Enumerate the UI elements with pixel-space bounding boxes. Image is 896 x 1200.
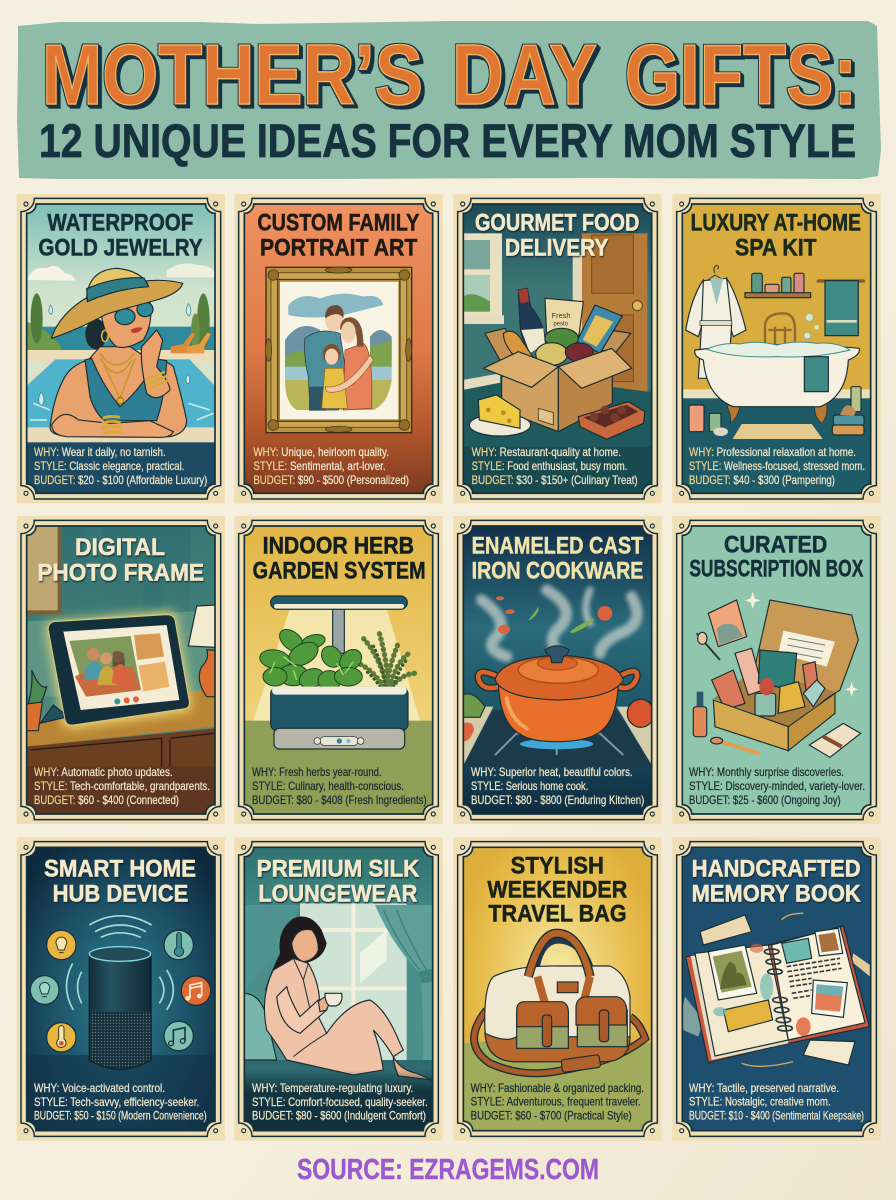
title line: GIFTS: [625, 28, 857, 123]
card: custom family portrait art [234, 194, 443, 503]
card frame [672, 516, 881, 824]
heading: LOUNGEWEAR [258, 881, 417, 908]
details text: BUDGET: $80 - $600 (Indulgent Comfort) [252, 1109, 426, 1122]
heading [689, 532, 863, 583]
heading [253, 532, 426, 584]
card frame [234, 194, 443, 503]
source line: SOURCE: EZRAGEMS.COM [297, 1154, 599, 1186]
details text: STYLE: Sentimental, art-lover. [253, 460, 386, 473]
heading: PHOTO FRAME [37, 560, 204, 587]
illustration: smart speaker with icons [26, 916, 215, 1132]
illustration: orange pot on stove [463, 590, 654, 767]
heading: CURATED [724, 532, 827, 559]
details text: WHY: Superior heat, beautiful colors. [471, 766, 633, 779]
details text: BUDGET: $80 - $800 (Enduring Kitchen) [471, 794, 644, 807]
details text: WHY: Fashionable & organized packing. [471, 1082, 644, 1095]
details text: BUDGET: $25 - $600 (Ongoing Joy) [689, 794, 841, 807]
card: indoor herb garden system [234, 516, 443, 824]
heading: DIGITAL [75, 534, 165, 561]
details text [689, 446, 865, 487]
details text: STYLE: Culinary, health-conscious. [252, 780, 404, 793]
details text: BUDGET: $60 - $400 (Connected) [34, 794, 179, 807]
heading [257, 210, 419, 262]
heading [472, 532, 644, 584]
heading: GOLD JEWELRY [38, 235, 203, 262]
title line [42, 28, 857, 123]
details text: STYLE: Adventurous, frequent traveler. [471, 1095, 641, 1108]
card: waterproof gold jewelry [17, 194, 225, 503]
details text: BUDGET: $50 - $150 (Modern Convenience) [34, 1109, 207, 1122]
illustration: open subscription box [693, 592, 861, 757]
details text: WHY: Automatic photo updates. [34, 766, 173, 779]
card: smart home hub device [17, 837, 225, 1141]
details text: WHY: Professional relaxation at home. [689, 446, 856, 459]
card frame [672, 837, 881, 1141]
details text: WHY: Restaurant-quality at home. [472, 446, 621, 459]
details text: STYLE: Wellness-focused, stressed mom. [689, 460, 865, 473]
card frame [453, 837, 662, 1141]
panel background [463, 847, 653, 1132]
title line: DAY [452, 28, 597, 123]
illustration: weekender bag [463, 933, 653, 1132]
illustration: delivery box: Fresh [552, 311, 570, 320]
heading: INDOOR HERB [263, 532, 414, 559]
heading: WATERPROOF [47, 210, 193, 237]
card: enameled cast iron cookware [453, 516, 662, 824]
details text: WHY: Wear it daily, no tarnish. [34, 446, 166, 459]
panel background [243, 204, 433, 493]
heading: SPA KIT [735, 235, 817, 262]
card: luxury at-home spa kit [672, 194, 881, 503]
details text [34, 1082, 207, 1122]
details text [472, 446, 638, 487]
details text: STYLE: Serious home cook. [471, 780, 588, 793]
illustration: herb garden [243, 596, 433, 815]
card frame [234, 516, 443, 824]
details text [689, 766, 865, 807]
card frame [17, 837, 225, 1141]
details text: BUDGET: $60 - $700 (Practical Style) [471, 1109, 632, 1122]
details text: WHY: Tactile, preserved narrative. [689, 1082, 839, 1095]
details text: BUDGET: $30 - $150+ (Culinary Treat) [472, 474, 638, 487]
details text: BUDGET: $90 - $500 (Personalized) [253, 474, 409, 487]
illustration: framed family portrait [266, 267, 412, 433]
heading: PORTRAIT ART [260, 235, 418, 262]
card: handcrafted memory book [672, 837, 881, 1141]
details text [252, 1082, 428, 1122]
details text [471, 766, 644, 807]
illustration: delivery box [463, 233, 653, 493]
heading: PREMIUM SILK [257, 856, 420, 883]
heading [692, 856, 861, 908]
panel background [681, 847, 871, 1132]
heading [44, 856, 196, 908]
heading [475, 210, 639, 262]
heading [37, 534, 204, 587]
illustration: woman in silk pajamas [243, 903, 433, 1132]
details text: WHY: Temperature-regulating luxury. [252, 1082, 413, 1095]
heading [38, 210, 203, 262]
details text: STYLE: Comfort-focused, quality-seeker. [252, 1096, 428, 1109]
details text: STYLE: Discovery-minded, variety-lover. [689, 780, 865, 793]
details text [253, 446, 409, 487]
illustration: bathroom with tub [681, 265, 871, 493]
card frame [672, 194, 881, 503]
heading: SMART HOME [44, 856, 196, 883]
card: digital photo frame [17, 516, 225, 824]
details text: BUDGET: $80 - $408 (Fresh Ingredients) [252, 794, 427, 807]
title banner [17, 21, 881, 179]
heading [691, 210, 861, 262]
illustration: woman by the pool [26, 263, 215, 442]
panel background [243, 847, 433, 1132]
heading: TRAVEL BAG [488, 901, 627, 928]
panel background [463, 204, 653, 493]
details text: BUDGET: $20 - $100 (Affordable Luxury) [34, 474, 207, 487]
panel background [463, 525, 653, 815]
card: curated subscription box [672, 516, 881, 824]
illustration: open memory book [682, 913, 870, 1066]
card frame [17, 194, 225, 503]
details text: WHY: Monthly surprise discoveries. [689, 766, 844, 779]
details text: STYLE: Tech-comfortable, grandparents. [34, 780, 210, 793]
card frame [453, 516, 662, 824]
illustration: delivery box: pesto [553, 321, 569, 327]
card: stylish weekender travel bag [453, 837, 662, 1141]
panel background [681, 204, 871, 493]
details text: BUDGET: $40 - $300 (Pampering) [689, 474, 835, 487]
card frame [453, 194, 662, 503]
panel background [681, 525, 871, 815]
heading: GARDEN SYSTEM [253, 557, 426, 584]
heading: CUSTOM FAMILY [257, 210, 419, 237]
heading: MEMORY BOOK [692, 881, 861, 908]
heading: ENAMELED CAST [472, 532, 644, 559]
title line: MOTHER’S [42, 28, 423, 123]
heading: GOURMET FOOD [475, 210, 639, 237]
panel background [26, 525, 215, 815]
details text [252, 766, 427, 807]
heading: STYLISH [511, 852, 604, 879]
details text: WHY: Unique, heirloom quality. [253, 446, 389, 459]
details text: WHY: Voice-activated control. [34, 1082, 165, 1095]
details text: WHY: Fresh herbs year-round. [252, 766, 382, 779]
card frame [17, 516, 225, 824]
details text [34, 446, 207, 487]
heading: HUB DEVICE [53, 881, 188, 908]
heading: DELIVERY [505, 235, 608, 262]
details text [689, 1082, 864, 1122]
info strip [26, 442, 215, 493]
details text: STYLE: Tech-savvy, efficiency-seeker. [34, 1096, 199, 1109]
details text: STYLE: Nostalgic, creative mom. [689, 1095, 831, 1108]
heading: WEEKENDER [487, 877, 627, 904]
illustration: digital frame on sideboard [26, 525, 215, 815]
card: premium silk loungewear [234, 837, 443, 1141]
info gradient [243, 1070, 433, 1132]
details text: STYLE: Food enthusiast, busy mom. [472, 460, 627, 473]
panel background [243, 525, 433, 722]
panel background [26, 204, 215, 493]
details text [34, 766, 210, 807]
panel background [26, 847, 215, 1132]
heading [257, 856, 420, 908]
details text: STYLE: Classic elegance, practical. [34, 460, 184, 473]
card frame [234, 837, 443, 1141]
heading [487, 852, 627, 928]
details text [471, 1082, 644, 1122]
heading: IRON COOKWARE [472, 557, 643, 584]
heading: HANDCRAFTED [692, 856, 861, 883]
card: gourmet food delivery [453, 194, 662, 503]
